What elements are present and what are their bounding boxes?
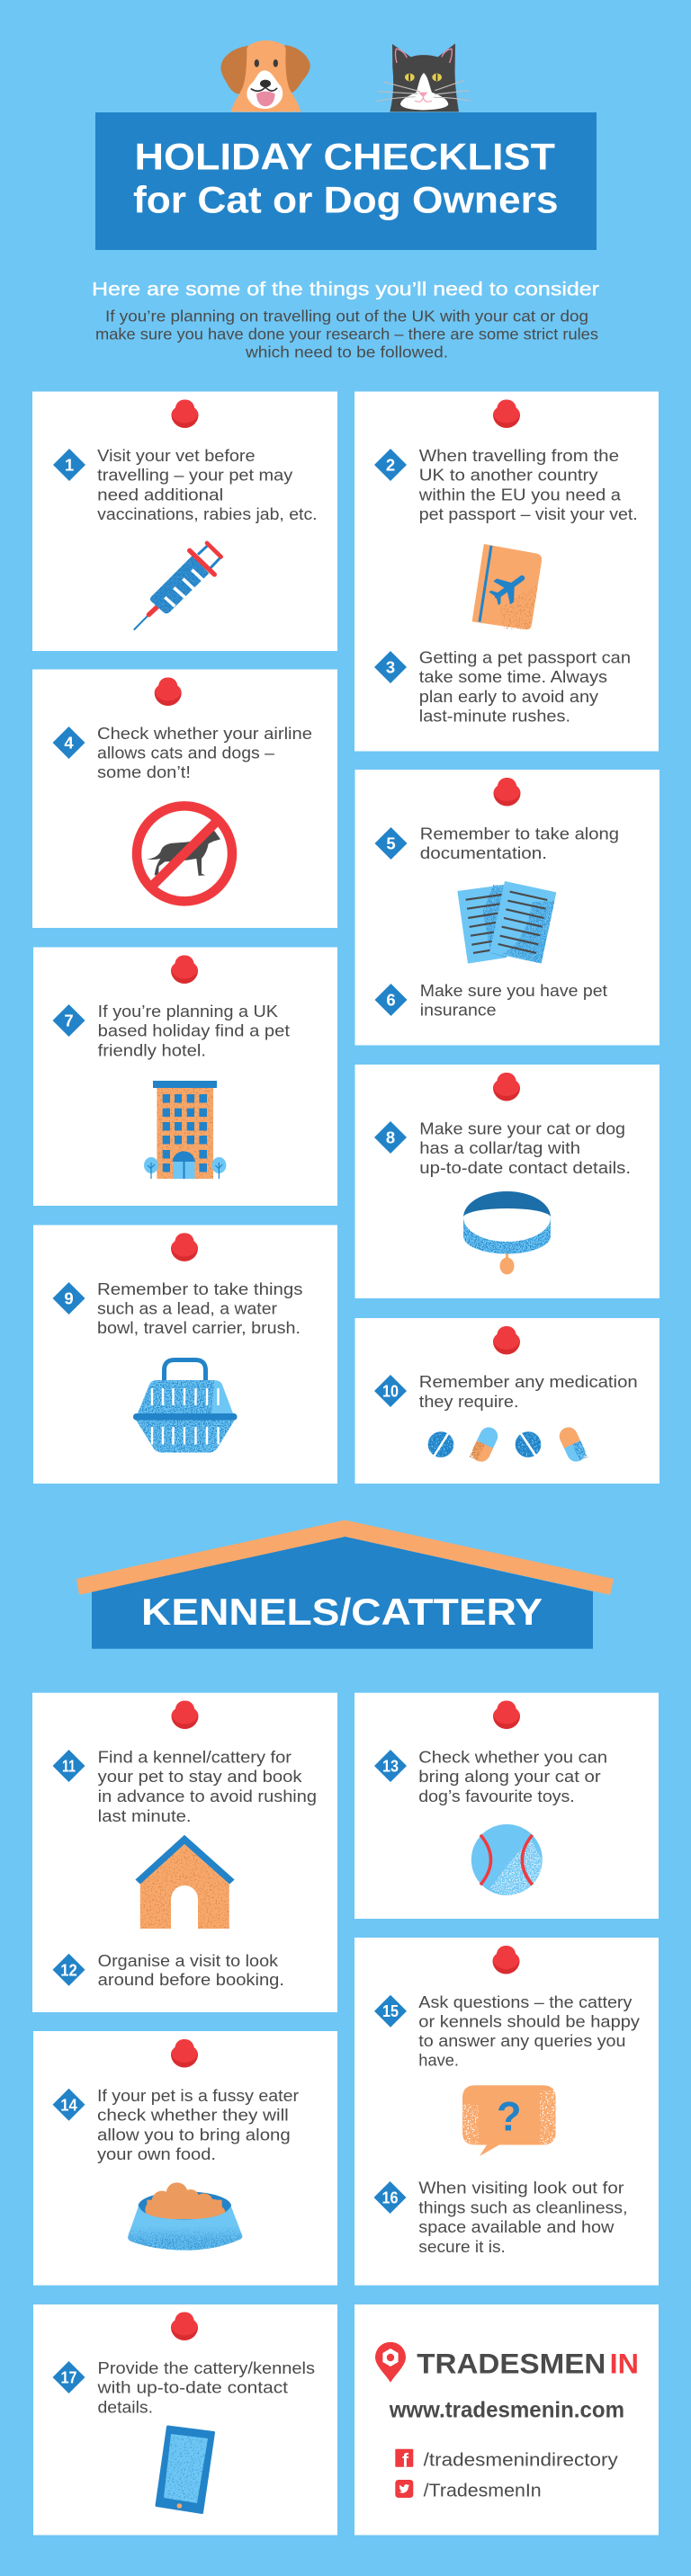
icon: question speech bubble: ? (497, 2093, 521, 2140)
panel: steps 15 and 16 questions: 15 (382, 2001, 399, 2020)
icon: travel carrier (133, 1359, 238, 1453)
panel: step 10 medication: Remember any medication (419, 1373, 638, 1391)
logo: wordmark: TRADESMEN (417, 2347, 606, 2379)
intro text: If you’re planning on travelling out of the UK with your cat or dog (105, 307, 588, 325)
panel: steps 11 and 12 kennel: in advance to avoid rushing (98, 1787, 317, 1805)
panel: steps 5 and 6 documents: 6 (386, 991, 396, 1009)
panel: steps 5 and 6 documents (354, 770, 660, 1045)
panel: steps 2 and 3 pet passport: pet passport – visit your vet. (419, 505, 638, 523)
panel: steps 2 and 3 pet passport: last-minute rushes. (419, 707, 570, 725)
panel: steps 5 and 6 documents: 5 (386, 834, 396, 852)
panel: steps 15 and 16 questions: 16 (381, 2188, 398, 2206)
panel: steps 11 and 12 kennel: Find a kennel/cattery for (98, 1748, 292, 1766)
panel: steps 11 and 12 kennel: around before booking. (98, 1971, 284, 1989)
website address: www.tradesmenin.com (389, 2397, 624, 2422)
panel: step 10 medication: they require. (419, 1393, 518, 1411)
panel: steps 5 and 6 documents: Make sure you have pet (420, 982, 607, 1000)
icon: pills (428, 1424, 588, 1465)
panel: step 1 vet visit: need additional (97, 486, 223, 504)
panel: step 14 food: check whether they will (97, 2106, 289, 2124)
intro text: which need to be followed. (245, 343, 448, 361)
panel: step 4 airline: some don’t! (97, 763, 191, 781)
panel: steps 2 and 3 pet passport (354, 392, 659, 752)
panel: step 17 contact details: details. (97, 2399, 153, 2417)
panel: step 13 toys: dog’s favourite toys. (418, 1787, 575, 1805)
panel: step 9 carrier: such as a lead, a water (97, 1300, 277, 1318)
panel: steps 11 and 12 kennel: last minute. (98, 1807, 192, 1825)
logo: wordmark: IN (610, 2347, 639, 2379)
panel: step 7 hotel: 7 (64, 1011, 74, 1030)
panel: step 8 collar: Make sure your cat or dog (419, 1120, 625, 1138)
panel: step 4 airline (32, 669, 337, 928)
panel: steps 2 and 3 pet passport: take some time. Always (419, 668, 607, 686)
panel: steps 11 and 12 kennel: your pet to stay and book (98, 1768, 303, 1786)
icon: hotel (144, 1081, 226, 1179)
panel: step 14 food: If your pet is a fussy eater (97, 2087, 299, 2105)
panel: steps 5 and 6 documents: documentation. (420, 844, 547, 862)
panel: step 9 carrier: 9 (64, 1289, 74, 1307)
panel: step 7 hotel: If you’re planning a UK (98, 1003, 278, 1021)
panel: step 8 collar: up-to-date contact details. (419, 1159, 631, 1177)
icon: mobile phone (157, 2427, 214, 2512)
panel: step 13 toys (354, 1693, 659, 1919)
panel: step 10 medication (354, 1318, 660, 1484)
panel: steps 2 and 3 pet passport: 2 (386, 455, 395, 475)
panel: steps 2 and 3 pet passport: When travelling from the (419, 447, 619, 465)
icon: twitter (395, 2480, 413, 2498)
panel: step 9 carrier: Remember to take things (97, 1280, 302, 1298)
panel: step 14 food: allow you to bring along (97, 2126, 291, 2144)
panel: step 17 contact details: Provide the cattery/kennels (97, 2359, 315, 2377)
icon: collar (463, 1191, 551, 1275)
panel: step 4 airline: allows cats and dogs – (97, 744, 274, 762)
panel: step 13 toys: 13 (382, 1757, 399, 1775)
panel: step 13 toys: bring along your cat or (418, 1768, 601, 1786)
title banner: for Cat or Dog Owners (133, 179, 558, 221)
title banner: HOLIDAY CHECKLIST (135, 135, 555, 177)
icon: facebook: f (402, 2451, 409, 2471)
panel: step 8 collar: 8 (386, 1128, 395, 1147)
panel: steps 2 and 3 pet passport: Getting a pet passport can (419, 649, 631, 667)
panel: step 10 medication: 10 (382, 1381, 399, 1401)
panel: step 17 contact details: with up-to-date contact (96, 2379, 288, 2397)
icon: ball (471, 1824, 543, 1895)
panel: step 14 food: your own food. (97, 2145, 216, 2163)
panel: step 17 contact details (33, 2304, 337, 2536)
panel: step 1 vet visit: travelling – your pet may (97, 467, 292, 485)
panel: steps 15 and 16 questions: things such as cleanliness, (418, 2199, 628, 2217)
icon: passport (472, 544, 542, 629)
panel: step 4 airline: Check whether your airline (97, 725, 312, 743)
panel: steps 11 and 12 kennel: Organise a visit to look (98, 1952, 279, 1970)
icon: syringe (134, 543, 221, 629)
panel: steps 2 and 3 pet passport: plan early to avoid any (419, 688, 598, 706)
panel: steps 15 and 16 questions: When visiting look out for (418, 2179, 624, 2197)
panel: step 4 airline: 4 (64, 734, 74, 752)
twitter handle: /TradesmenIn (424, 2481, 542, 2501)
panel: steps 15 and 16 questions (354, 1938, 659, 2286)
illustration: dog (220, 40, 310, 111)
panel: step 8 collar: has a collar/tag with (419, 1139, 580, 1157)
intro text: make sure you have done your research – there are some strict rules (95, 325, 598, 343)
panel: Tradesmenin contact (354, 2304, 659, 2536)
panel: step 1 vet visit: 1 (65, 455, 74, 475)
icon: facebook (395, 2449, 413, 2471)
panel: steps 15 and 16 questions: space available and how (418, 2218, 615, 2236)
panel: steps 2 and 3 pet passport: within the EU you need a (418, 486, 622, 504)
panel: step 7 hotel: based holiday find a pet (98, 1022, 290, 1040)
icon: question speech bubble (462, 2085, 556, 2156)
subheading: Here are some of the things you’ll need to consider (92, 279, 599, 299)
panel: steps 11 and 12 kennel (32, 1693, 337, 2012)
logo: location pin (375, 2342, 406, 2383)
icon: documents (457, 881, 556, 964)
panel: step 14 food: 14 (60, 2095, 77, 2114)
panel: step 13 toys: Check whether you can (418, 1748, 607, 1766)
panel: step 9 carrier: bowl, travel carrier, brush. (97, 1319, 301, 1337)
intro text (95, 307, 598, 361)
panel: step 1 vet visit: vaccinations, rabies jab, etc. (97, 505, 318, 523)
icon: dog kennel (135, 1835, 235, 1929)
panel: steps 15 and 16 questions: have. (418, 2051, 459, 2069)
panel: step 9 carrier (33, 1225, 337, 1484)
panel: steps 5 and 6 documents: Remember to take along (420, 825, 619, 843)
kennels and cattery banner (76, 1520, 614, 1649)
panel: step 1 vet visit: Visit your vet before (97, 447, 256, 465)
panel: steps 11 and 12 kennel: 11 (62, 1757, 76, 1775)
kennels and cattery banner: KENNELS/CATTERY (141, 1591, 543, 1633)
panel: steps 15 and 16 questions: secure it is. (418, 2238, 506, 2256)
panel: steps 11 and 12 kennel: 12 (60, 1960, 77, 1979)
panel: steps 15 and 16 questions: Ask questions – the cattery (418, 1993, 632, 2011)
panel: step 7 hotel: friendly hotel. (98, 1041, 206, 1059)
panel: steps 2 and 3 pet passport: UK to another country (419, 467, 598, 485)
panel: steps 15 and 16 questions: or kennels should be happy (418, 2012, 640, 2030)
title banner (95, 112, 597, 250)
panel: step 17 contact details: 17 (61, 2368, 77, 2386)
panel: steps 5 and 6 documents: insurance (420, 1001, 497, 1019)
panel: steps 15 and 16 questions: to answer any queries you (418, 2032, 626, 2050)
icon: food bowl (128, 2182, 242, 2251)
panel: step 14 food (33, 2031, 337, 2286)
icon: no dogs sign (137, 806, 232, 901)
panel: steps 2 and 3 pet passport: 3 (386, 658, 395, 676)
panel: step 1 vet visit (32, 392, 337, 651)
panel: step 8 collar (354, 1065, 660, 1298)
panel: step 7 hotel (33, 948, 337, 1206)
facebook handle: /tradesmenindirectory (424, 2450, 619, 2471)
illustration: cat (376, 43, 471, 111)
